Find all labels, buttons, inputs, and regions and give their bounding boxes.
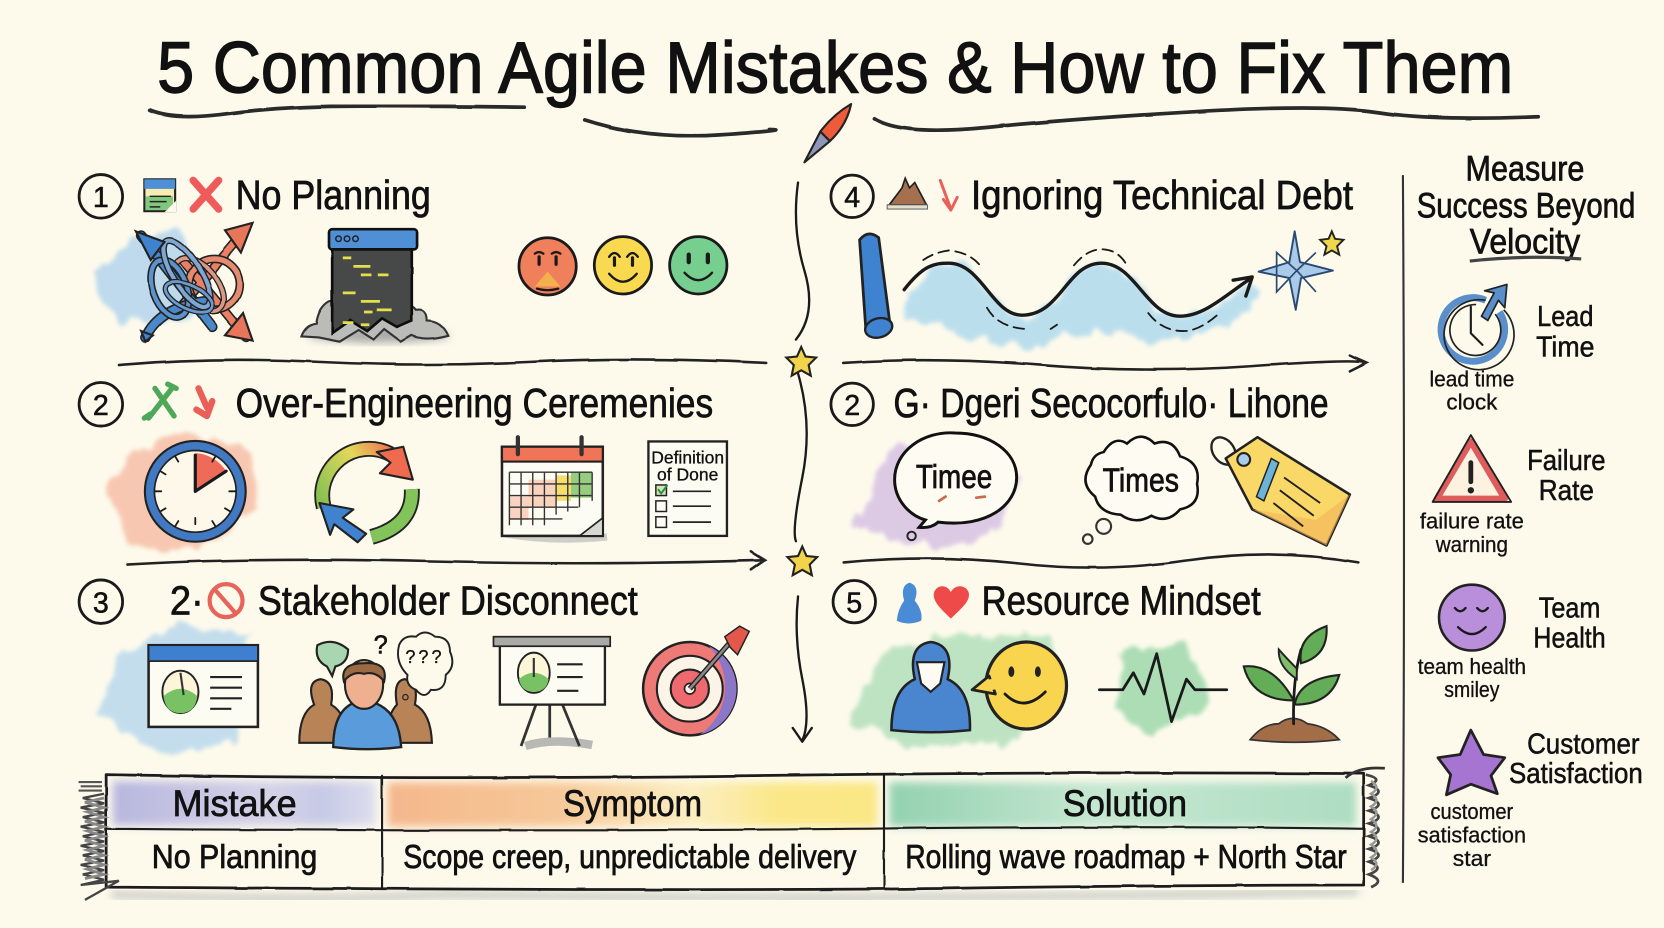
icon: server window in fog <box>301 229 450 343</box>
icon: green smiling face <box>670 237 727 294</box>
sidebar heading: Velocity <box>1470 223 1581 262</box>
panel: mistake 5 resource mindset <box>833 577 1339 748</box>
icon: definition of done checklist <box>648 441 727 536</box>
icon: heartbeat pulse <box>1099 645 1227 734</box>
icon: person <box>897 583 922 623</box>
number badge 3 <box>79 580 123 623</box>
column heading solution: Solution <box>1063 782 1187 824</box>
number badge 5: 5 <box>846 587 862 619</box>
number badge 3: 3 <box>93 587 109 619</box>
number badge 2 <box>831 383 873 426</box>
panel: mistake 2b garbled section <box>831 380 1350 550</box>
number badge 4: 4 <box>844 182 860 214</box>
icon: price tag <box>1206 433 1350 545</box>
number badge 5 <box>833 580 876 623</box>
icon: presentation board <box>493 637 610 746</box>
icon: confused stakeholders: ??? <box>405 647 441 667</box>
number badge 1 <box>79 175 123 218</box>
panel: mistake 2 over-engineering ceremonies <box>79 380 727 552</box>
metric: team health: smiley <box>1444 677 1500 702</box>
panel: mistake 3 stakeholder disconnect <box>79 577 749 756</box>
number badge 4 <box>831 175 873 218</box>
metric: customer satisfaction: Customer <box>1527 728 1640 760</box>
icon: sprout plant <box>1244 626 1339 742</box>
icon: green crossed tools <box>144 384 176 418</box>
thought cloud <box>1083 437 1198 544</box>
icon: heart <box>934 586 969 619</box>
metric: customer satisfaction: star <box>1453 846 1492 871</box>
number badge 2 <box>79 383 123 426</box>
metric: lead time: lead time <box>1429 366 1514 391</box>
heading: Resource Mindset <box>982 577 1261 623</box>
icon: calendar <box>502 437 607 539</box>
metric: customer satisfaction: satisfaction <box>1418 823 1526 848</box>
stray numbering text: 2· <box>170 577 204 623</box>
icon: north star <box>1259 231 1343 310</box>
icon: prohibited ring <box>210 584 243 617</box>
icon: definition of done checklist: Definition <box>651 448 724 468</box>
number badge 2: 2 <box>844 390 860 422</box>
metric: team health: team health <box>1418 654 1526 679</box>
metric: failure rate: failure rate <box>1420 508 1524 533</box>
table frame and rules <box>106 773 1364 890</box>
icon: yellow smiling face <box>594 237 652 294</box>
icon: red arrow down <box>940 180 957 210</box>
heading: G· Dgeri Secocorfulo· Lihone <box>894 380 1329 426</box>
metric: lead time <box>1429 284 1594 415</box>
icon: warning triangle <box>1433 435 1511 502</box>
panel: mistake 1 no planning <box>79 172 727 343</box>
icon: blue scroll <box>860 234 894 341</box>
panel: mistake 4 ignoring technical debt <box>831 172 1353 344</box>
icon: definition of done checklist: of Done <box>657 465 718 485</box>
speech bubble <box>854 433 1024 550</box>
icon: red cross <box>193 180 219 209</box>
icon: prohibited sign <box>213 588 237 614</box>
table header washes <box>113 781 1356 827</box>
icon: clock with wash <box>106 433 255 552</box>
icon: hooded person and smiley with wash <box>854 635 1067 748</box>
metric: lead time: Time <box>1536 332 1594 364</box>
icon: purple smiley <box>1439 585 1505 651</box>
heading: Ignoring Technical Debt <box>971 172 1353 218</box>
icon: tangled arrows knot <box>93 223 253 342</box>
column heading symptom: Symptom <box>563 782 702 824</box>
icon: cycle arrows <box>319 447 413 542</box>
icon: red unhappy face <box>519 238 576 295</box>
right torn fringe <box>1346 768 1385 887</box>
heading: Over-Engineering Ceremenies <box>236 380 713 426</box>
left torn fringe <box>79 782 119 900</box>
sidebar divider <box>1403 175 1404 883</box>
metric: customer satisfaction <box>1418 728 1643 871</box>
icon: target with arrow <box>643 626 749 735</box>
thought cloud: Times <box>1103 461 1179 498</box>
metric: failure rate: Rate <box>1539 475 1594 507</box>
metric: team health <box>1418 585 1606 702</box>
icon: purple star <box>1438 730 1505 795</box>
cell mistake: No Planning <box>152 838 317 875</box>
metric: customer satisfaction: customer <box>1431 799 1514 824</box>
icon: debt mountain <box>887 178 928 209</box>
table shadow <box>111 891 1358 898</box>
panel: measure success sidebar <box>1417 149 1643 871</box>
number badge 2: 2 <box>93 390 109 422</box>
sidebar heading <box>1417 149 1635 262</box>
summary table <box>79 768 1385 900</box>
metric: lead time: clock <box>1446 390 1498 415</box>
icon: star upper <box>786 347 816 376</box>
cell solution: Rolling wave roadmap + North Star <box>905 838 1347 875</box>
metric: lead time: Lead <box>1537 301 1593 333</box>
centre vertical flow line with stars <box>786 183 817 742</box>
icon: paintbrush <box>804 104 851 162</box>
sidebar heading: Measure <box>1466 149 1584 188</box>
metric: customer satisfaction: Satisfaction <box>1509 758 1643 790</box>
icon: star lower <box>787 547 817 575</box>
icon: confused stakeholders: ? <box>374 632 388 660</box>
icon: lead time clock <box>1441 284 1514 370</box>
heading: Stakeholder Disconnect <box>258 577 638 623</box>
speech bubble: Timee <box>916 458 992 495</box>
cell symptom: Scope creep, unpredictable delivery <box>403 838 857 875</box>
metric: failure rate: warning <box>1435 532 1508 557</box>
icon: wave path with arrow <box>904 249 1258 344</box>
metric: team health: Team <box>1539 593 1600 625</box>
column heading mistake: Mistake <box>172 782 297 824</box>
title underline strokes <box>150 106 1539 136</box>
icon: planning document <box>144 179 176 212</box>
section dividers <box>119 355 1367 570</box>
metric: team health: Health <box>1533 622 1606 654</box>
number badge 1: 1 <box>93 182 109 214</box>
icon: dashboard window with wash <box>98 626 258 756</box>
metric: failure rate <box>1420 435 1606 557</box>
title: 5 Common Agile Mistakes & How to Fix Them <box>157 28 1513 108</box>
icon: red down arrow <box>196 388 212 416</box>
heading: No Planning <box>236 172 431 218</box>
metric: failure rate: Failure <box>1527 445 1606 477</box>
icon: confused stakeholders <box>299 632 452 749</box>
